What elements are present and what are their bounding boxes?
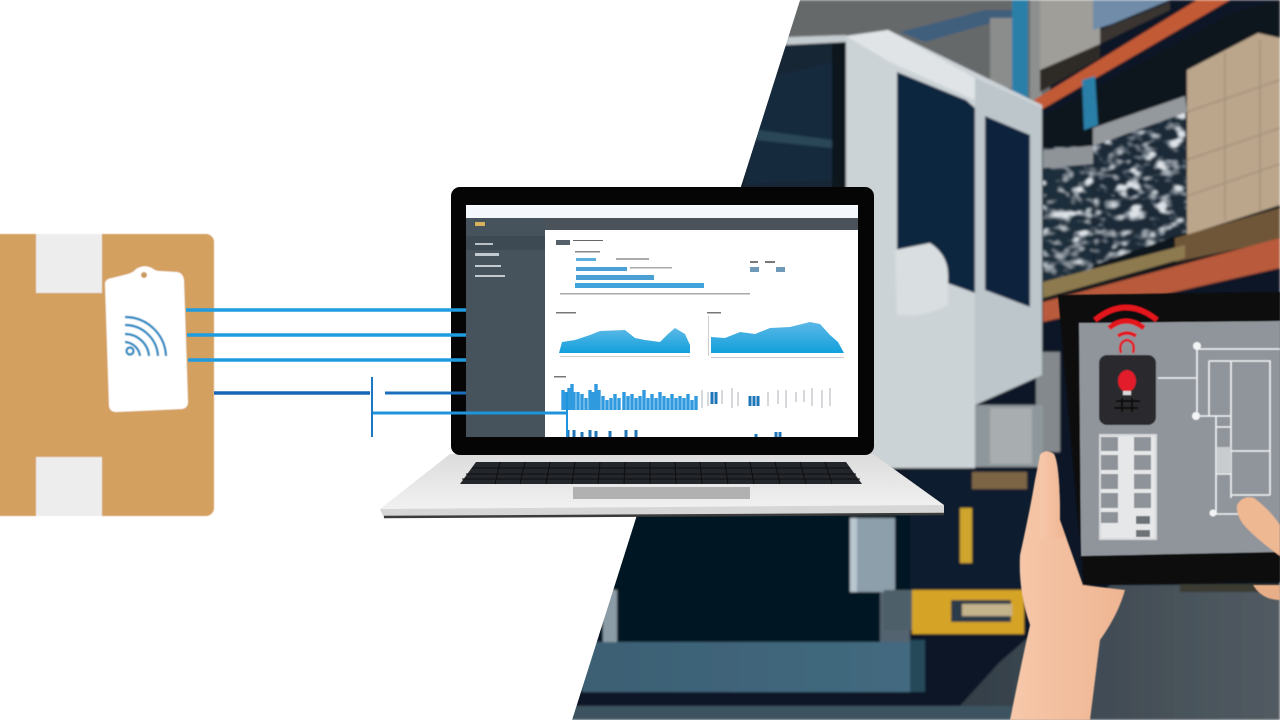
dashboard sidebar: [466, 218, 545, 437]
floor: [560, 584, 1280, 720]
dashboard histogram: [554, 376, 830, 437]
steel blue base: [582, 642, 914, 692]
machine dark side section: [742, 34, 848, 187]
line 2: [187, 333, 466, 337]
warehouse ceiling and wall: [780, 0, 1050, 105]
laptop: [380, 187, 944, 518]
machine window left: [897, 72, 975, 293]
lower pallets and orange beam: [1036, 238, 1280, 452]
floorplan highlighted room: [1217, 447, 1231, 473]
left hand: [1010, 451, 1125, 720]
foil stack right: [1093, 96, 1187, 265]
yellow forklift part: [884, 590, 1024, 634]
laptop deck: [380, 454, 944, 517]
right hand remains: [1253, 585, 1280, 600]
dashboard area chart right: [707, 312, 844, 358]
tablet screen: [1079, 321, 1280, 556]
line 5: [373, 412, 566, 414]
floorplan lines: [1158, 346, 1280, 514]
package box: [0, 234, 214, 516]
dashboard area chart left: [556, 312, 690, 357]
panel: warehouse photo background: [560, 0, 1280, 720]
laptop trackpad: [573, 487, 750, 499]
machine white cabinet: [846, 30, 1042, 468]
hand thumb over tablet edge: [1040, 451, 1066, 540]
dashboard bar chart: [556, 240, 785, 294]
line 1: [186, 308, 466, 312]
line 4: [214, 391, 370, 395]
foil stack left: [1043, 146, 1093, 282]
line junction vertical: [371, 377, 373, 437]
floorplan nodes: [1192, 342, 1216, 516]
line 3: [188, 358, 466, 362]
lower machine body: [600, 470, 1040, 645]
laptop keyboard: [460, 462, 862, 484]
tablet with hands: [1010, 292, 1280, 720]
icon: cardboard package with RFID tag: [0, 234, 214, 516]
orange shelf beam upper: [1034, 0, 1230, 114]
machine white bin detail: [895, 243, 948, 316]
icon: red wireless signal: [1095, 308, 1157, 353]
tan cardboard stack: [1175, 33, 1280, 262]
line 5 drop: [566, 392, 568, 437]
shelf dark interior: [1040, 0, 1280, 310]
upper shelf pallets: [1040, 0, 1170, 92]
machine window right: [985, 116, 1030, 307]
dashboard window bar: [466, 206, 858, 218]
pointing finger: [1237, 497, 1280, 556]
shelf list panel: [1099, 434, 1157, 540]
icon: wifi signal on tag: [125, 317, 166, 356]
RFID tracker device: [1099, 345, 1156, 425]
dashboard top bar: [466, 218, 858, 230]
laptop bezel: [451, 187, 874, 455]
red alert bulb: [1118, 370, 1136, 392]
connection lines from tag to laptop: [186, 310, 567, 437]
panel: white diagonal background edge: [0, 0, 800, 720]
package tape top: [36, 234, 102, 293]
RFID tag: [105, 266, 188, 412]
tablet body: [1058, 292, 1280, 585]
line 4 continued: [385, 392, 466, 394]
laptop screen: [466, 205, 858, 437]
package tape bottom: [36, 457, 102, 516]
